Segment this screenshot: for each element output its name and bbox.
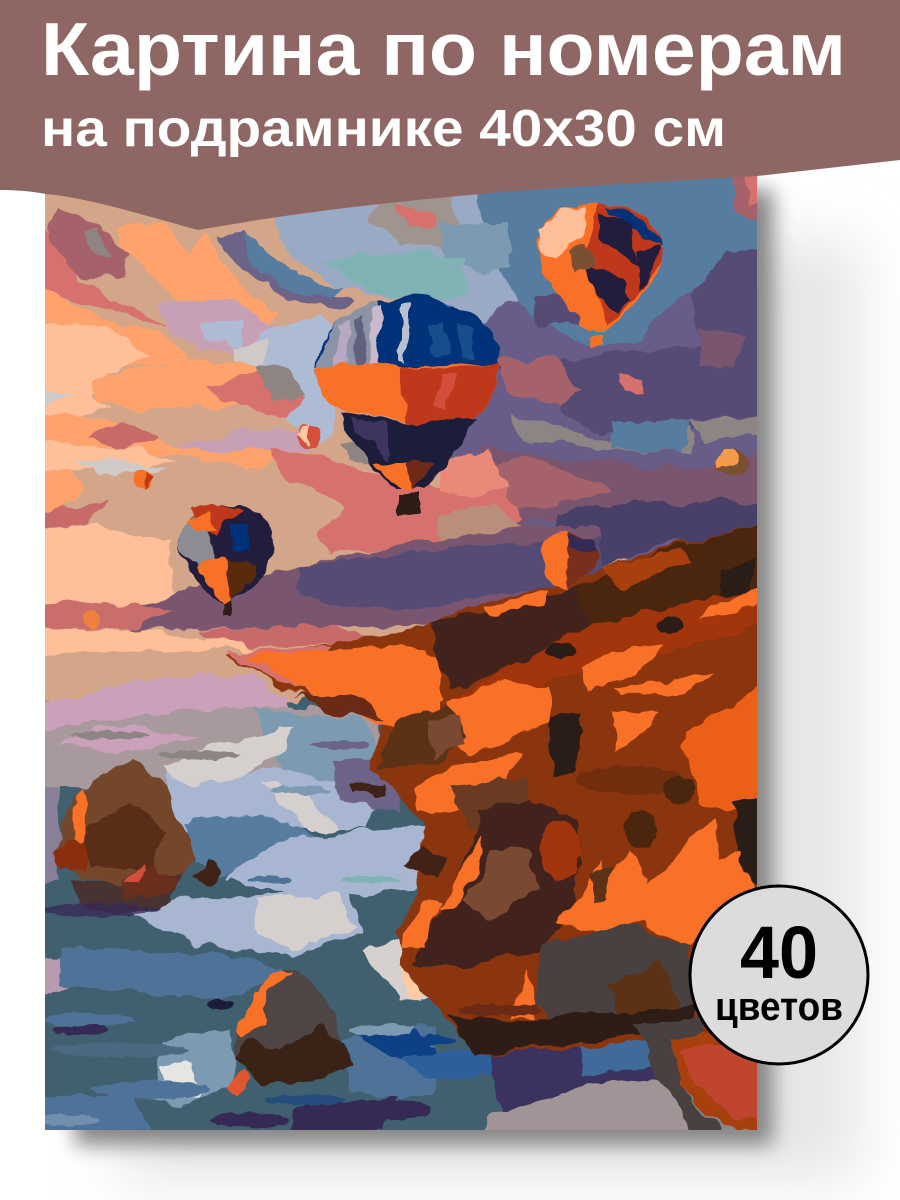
large balloon [314, 298, 502, 516]
badge: 40 colours: 40 [740, 911, 818, 994]
cliffs [225, 525, 780, 1135]
sea [45, 672, 688, 1130]
sky [45, 176, 757, 704]
canvas drop shadow [75, 190, 860, 1180]
distant balloon near cliff [539, 531, 599, 592]
badge: 40 colours [690, 886, 868, 1064]
subtitle: на подрамнике 40х30 см [41, 100, 726, 158]
left balloon [179, 504, 274, 615]
small balloons [85, 425, 748, 628]
painting: balloons over the sea [45, 176, 757, 1130]
header banner [0, 0, 900, 230]
rocks [52, 760, 443, 1095]
title: Картина по номерам [41, 7, 846, 91]
upper right balloon [538, 203, 662, 347]
badge: 40 colours: цветов [715, 985, 843, 1029]
water ripples [40, 617, 696, 1127]
